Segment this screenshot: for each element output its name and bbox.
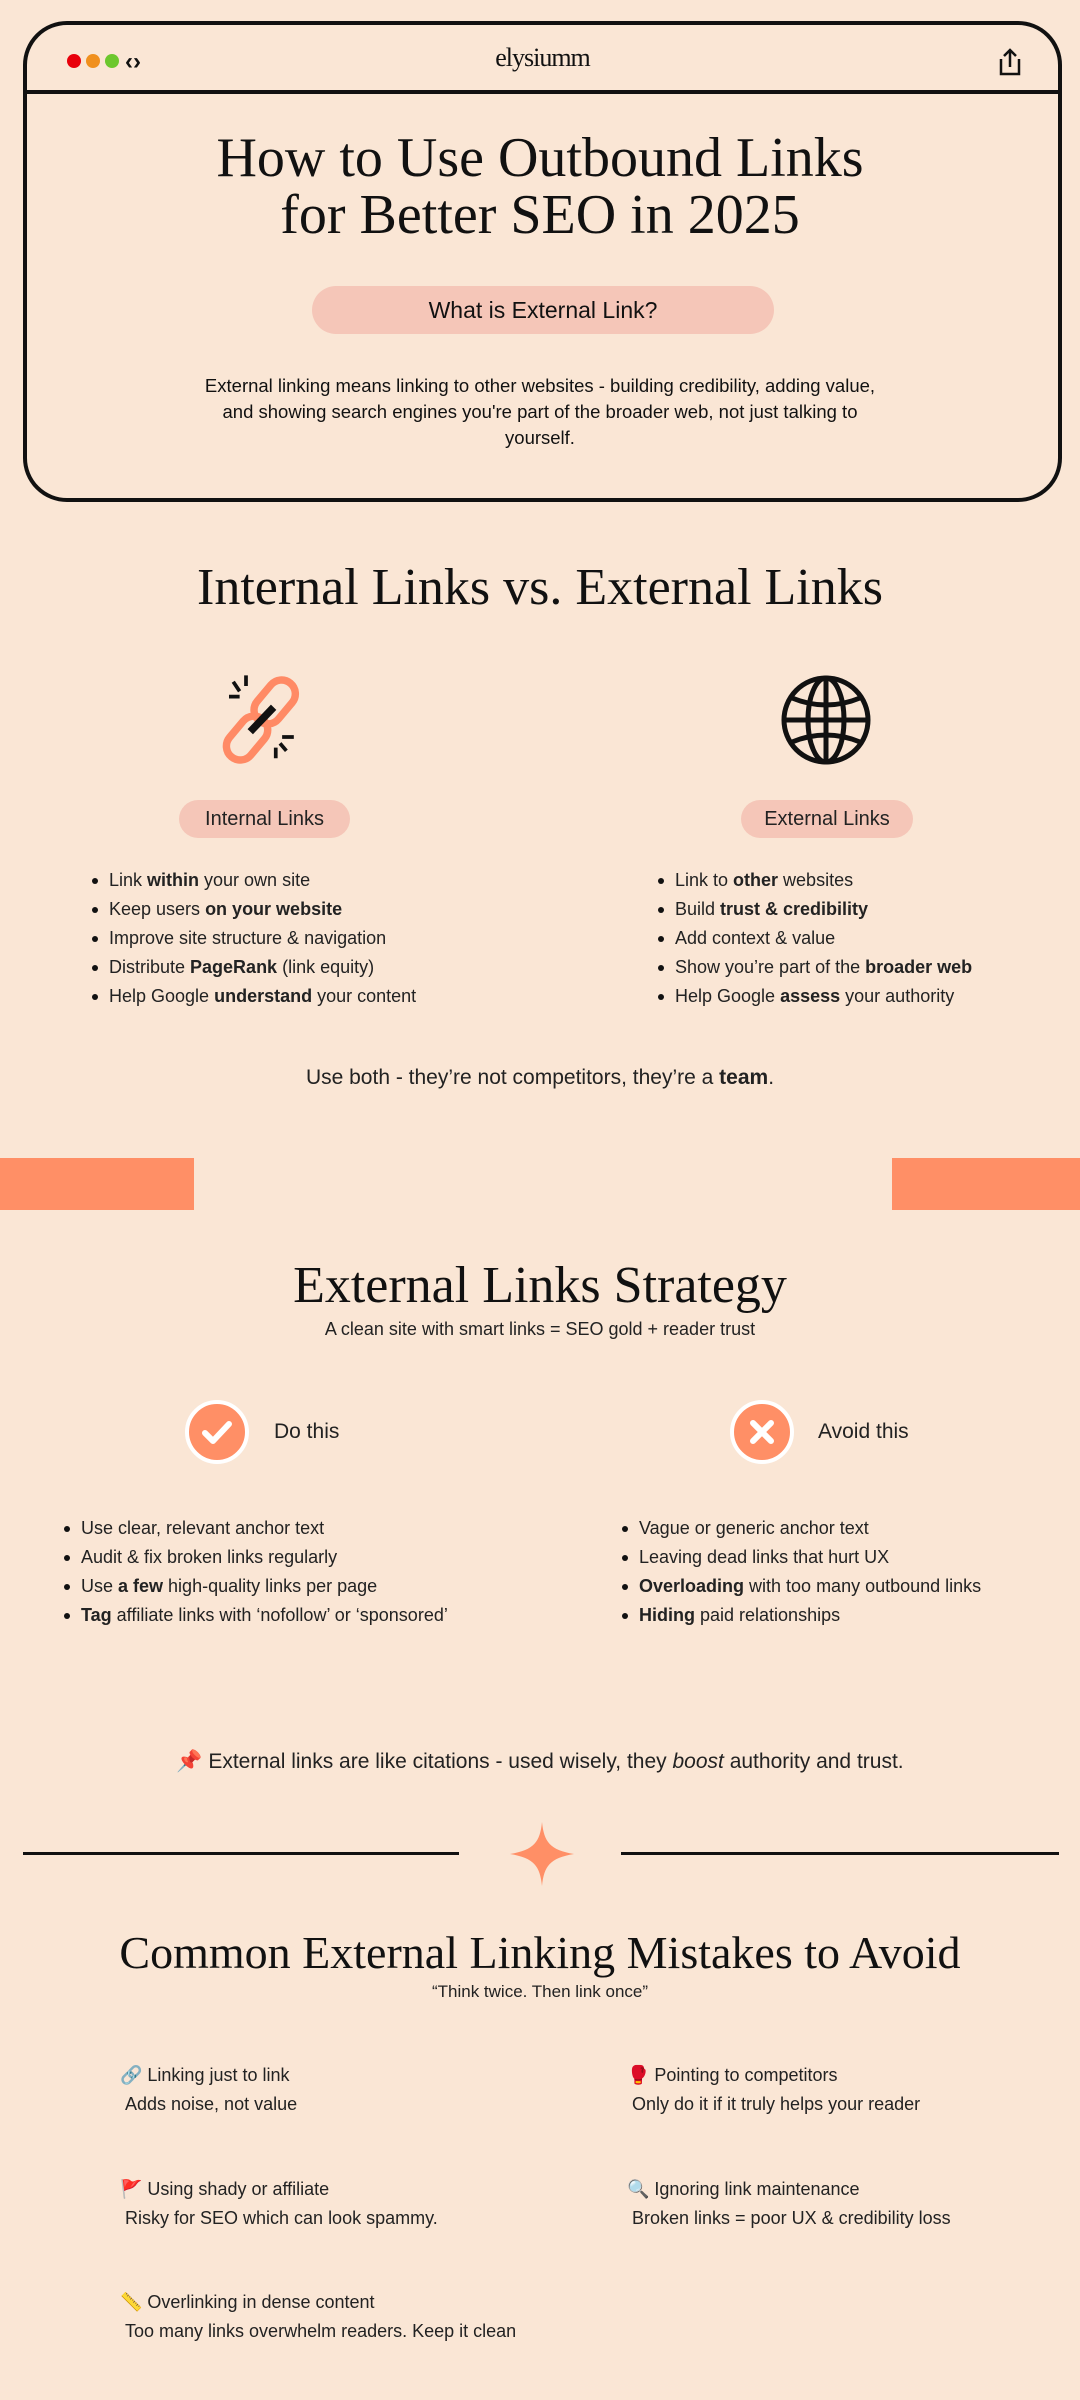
mistake: linking just to link (120, 2065, 297, 2114)
list: external: Help Google assess your authority (675, 986, 954, 1006)
list: external (658, 870, 972, 1006)
orange bar right (892, 1158, 1080, 1210)
list: do (64, 1518, 448, 1625)
pill: Internal Links: Internal Links (205, 808, 324, 830)
mistake: overlinking: 📏 Overlinking in dense content (120, 2292, 375, 2312)
note: citations: 📌 External links are like citations - used wisely, they boost authority and trust. (176, 1750, 904, 1773)
pill: External Links (741, 800, 913, 838)
logo: elysiumm (495, 43, 590, 72)
list: do: Use a few high-quality links per page (81, 1576, 377, 1596)
window dots (67, 48, 141, 75)
list: internal: Link within your own site (109, 870, 310, 890)
mistake: linking just to link: 🔗 Linking just to link (120, 2065, 290, 2085)
mistake: linking just to link: Adds noise, not value (125, 2094, 297, 2114)
divider left (23, 1852, 459, 1855)
list: avoid: Overloading with too many outbound links (639, 1576, 981, 1596)
list: do: Audit & fix broken links regularly (81, 1547, 337, 1567)
browser card (23, 21, 1062, 502)
label: Do this: Do this (274, 1420, 339, 1443)
icon: globe (782, 676, 870, 764)
heading: mistakes: Common External Linking Mistakes to Avoid (119, 1927, 961, 1978)
intro paragraph: External linking means linking to other websites - building credibility, adding value, and showing search engines you're part of the broader web, not just talking to yourself. (205, 375, 875, 448)
list: internal: Improve site structure & navigation (109, 928, 386, 948)
list: avoid (622, 1518, 981, 1625)
list: internal: Distribute PageRank (link equity) (109, 957, 374, 977)
icon: broken chain (222, 675, 300, 764)
list: external: Show you’re part of the broader web (675, 957, 972, 977)
header divider (23, 90, 1062, 94)
orange bar left (0, 1158, 194, 1210)
divider right (621, 1852, 1059, 1855)
note: use both: Use both - they’re not competitors, they’re a team. (306, 1066, 774, 1089)
list: avoid: Leaving dead links that hurt UX (639, 1547, 889, 1567)
mistake: competitors: 🥊 Pointing to competitors (627, 2065, 838, 2085)
window dots: ‹› (125, 48, 141, 75)
list: external: Add context & value (675, 928, 835, 948)
list: internal: Keep users on your website (109, 899, 342, 919)
mistake: competitors (627, 2064, 920, 2114)
list: external: Build trust & credibility (675, 899, 868, 919)
pill: What is External Link: What is External Link? (429, 297, 657, 323)
mistake: shady: Risky for SEO which can look spammy. (125, 2208, 438, 2228)
pill: What is External Link (312, 286, 774, 334)
subtitle quote: “Think twice. Then link once” (432, 1982, 648, 2001)
list: avoid: Hiding paid relationships (639, 1605, 840, 1625)
mistake: overlinking (120, 2292, 516, 2341)
mistake: maintenance (627, 2179, 951, 2228)
mistake: maintenance: Broken links = poor UX & credibility loss (632, 2208, 951, 2228)
title: for Better SEO in 2025 (280, 184, 800, 246)
list: internal (92, 870, 416, 1006)
list: do: Tag affiliate links with ‘nofollow’ or ‘sponsored’ (81, 1605, 448, 1625)
mistake: shady (120, 2179, 438, 2228)
list: external: Link to other websites (675, 870, 853, 890)
icon: check (185, 1400, 249, 1464)
list: avoid: Vague or generic anchor text (639, 1518, 869, 1538)
list: internal: Help Google understand your content (109, 986, 416, 1006)
heading: internal vs external: Internal Links vs. External Links (197, 559, 883, 616)
mistake: shady: 🚩 Using shady or affiliate (120, 2179, 329, 2199)
icon: star (510, 1822, 574, 1886)
heading: strategy: External Links Strategy (293, 1257, 787, 1314)
mistake: overlinking: Too many links overwhelm readers. Keep it clean (125, 2321, 516, 2341)
mistake: competitors: Only do it if it truly helps your reader (632, 2094, 920, 2114)
icon: cross (730, 1400, 794, 1464)
title (216, 127, 864, 246)
list: do: Use clear, relevant anchor text (81, 1518, 324, 1538)
subtitle: A clean site with smart links = SEO gold + reader trust (325, 1319, 755, 1339)
title: How to Use Outbound Links (216, 127, 864, 189)
pill: Internal Links (179, 800, 350, 838)
label: Avoid this: Avoid this (818, 1420, 909, 1443)
mistake: maintenance: 🔍 Ignoring link maintenance (627, 2179, 860, 2199)
icon: share (1000, 48, 1020, 76)
pill: External Links: External Links (764, 808, 890, 830)
